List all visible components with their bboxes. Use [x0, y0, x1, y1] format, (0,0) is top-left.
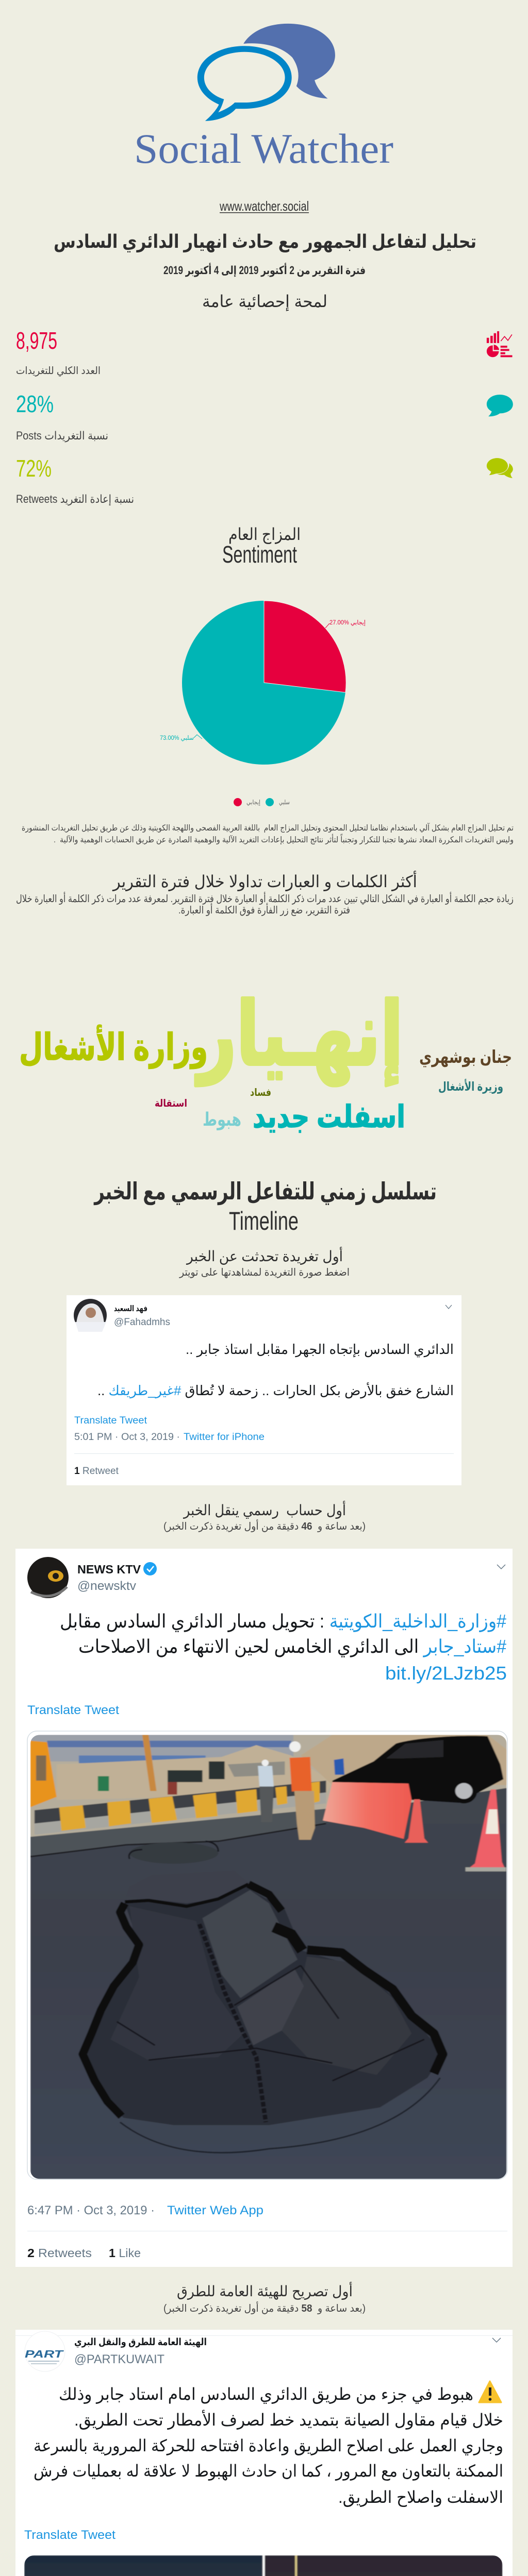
caption: first tweet	[179, 1246, 350, 1278]
panel: NEWS KTV tweet: 6:47 PM · Oct 3, 2019 ·	[27, 2204, 155, 2217]
pie chart: sentiment	[160, 601, 366, 765]
tweet text: PART statement: هبوط في جزء من طريق الدائري السادس امام استاد جابر وذلك	[59, 2385, 473, 2404]
tweet text: PART statement: وجاري العمل على اصلاح الطريق واعادة افتتاحه للحركة المرورية بالسرعة	[34, 2436, 503, 2455]
tweet text: PART statement: الممكنة بالتعاون مع المرور ، كما ان حادث الهبوط لا علاقة له بعمليات فرش	[34, 2462, 503, 2481]
stat: total tweets	[16, 327, 101, 377]
stat: posts share: نسبة التغريدات Posts	[16, 429, 108, 442]
logo: two speech bubbles	[197, 24, 335, 121]
avatar: Fahad	[74, 1299, 107, 1332]
heading: sentiment	[222, 525, 301, 568]
panel: NEWS KTV tweet: #وزارة_الداخلية_الكويتية : تحويل مسار الدائري السادس مقابل	[60, 1611, 506, 1632]
heading: timeline: Timeline	[229, 1207, 299, 1235]
photo: repair crew and excavator	[24, 2555, 503, 2576]
heading: timeline	[94, 1178, 437, 1235]
label: positive share	[325, 619, 366, 628]
caption: first official account: أول حساب رسمي ينقل الخبر	[183, 1500, 346, 1519]
panel: first tweet: الشارع خفق بالأرض بكل الحارات .. زحمة لا تُطاق #غير_طريقك ..	[97, 1382, 454, 1399]
website link: www.watcher.social	[219, 198, 309, 214]
word cloud: استقالة	[155, 1098, 187, 1109]
heading: sentiment: Sentiment	[222, 541, 297, 568]
caption: roads authority statement: (بعد ساعة و 58 دقيقة من أول تغريدة ذكرت الخبر)	[163, 2301, 366, 2314]
stat: retweets share	[16, 455, 134, 506]
icon: verified badge	[143, 1562, 157, 1575]
stat: retweets share: نسبة إعادة التغريد Retweets	[16, 493, 134, 506]
panel: NEWS KTV tweet: @newsktv	[77, 1579, 136, 1593]
panel: first tweet: Twitter for iPhone	[184, 1432, 265, 1443]
word cloud: إنهـيار	[195, 986, 403, 1086]
avatar: NEWS KTV	[27, 1557, 69, 1598]
stat: posts share	[16, 391, 108, 442]
word cloud intro	[16, 892, 514, 916]
caption: first official account	[163, 1500, 366, 1532]
panel: NEWS KTV tweet	[15, 1549, 513, 2267]
caption: first official account: (بعد ساعة و 46 دقيقة من أول تغريدة ذكرت الخبر)	[163, 1519, 366, 1532]
label: negative share: سلبي %73.00	[160, 734, 194, 741]
tweet text: PART statement: خلال قيام مقاول الصيانة بتمديد خط لصرف الأمطار تحت الطريق.	[74, 2410, 503, 2430]
panel: PART Kuwait tweet: الهيئة العامة للطرق والنقل البري	[74, 2337, 207, 2348]
avatar: PART logo: PART	[25, 2349, 64, 2360]
heading: sentiment: المزاج العام	[228, 525, 301, 544]
heading: statistics overview: لمحة إحصائية عامة	[202, 292, 327, 311]
icon: warning triangle	[479, 2381, 501, 2402]
panel: PART Kuwait tweet: @PARTKUWAIT	[74, 2352, 164, 2366]
word cloud intro: فترة التقرير، ضع زر الفأرة فوق الكلمة أو العبارة.	[178, 903, 350, 916]
panel: first tweet: فهد السعيد	[114, 1304, 147, 1313]
stat: retweets share: 72%	[16, 455, 52, 482]
panel: NEWS KTV tweet: bit.ly/2LJzb25	[385, 1663, 507, 1684]
panel: first tweet: 1 Retweet	[74, 1466, 119, 1477]
panel: first tweet: Translate Tweet	[74, 1415, 147, 1426]
stat: total tweets: 8,975	[16, 327, 57, 354]
tweet text: PART statement: الاسفلت واصلاح الطريق.	[338, 2488, 503, 2507]
word cloud: هبوط	[203, 1109, 241, 1130]
panel: first tweet	[67, 1295, 461, 1485]
panel: NEWS KTV tweet: #ستاد_جابر الى الدائري الخامس لحين الانتهاء من الاصلاحات	[78, 1636, 506, 1657]
panel: NEWS KTV tweet: 2 Retweets	[27, 2246, 92, 2260]
icon: double speech bubbles	[487, 458, 513, 478]
pie legend: إيجابي	[246, 799, 260, 806]
tweet text: PART statement	[34, 2385, 503, 2507]
panel: PART Kuwait tweet	[15, 2330, 513, 2576]
panel: first tweet: الدائري السادس بإتجاه الجهرا مقابل استاذ جابر ..	[186, 1342, 454, 1358]
word cloud: اسفلت جديد	[253, 1099, 405, 1134]
brand name: Social Watcher	[134, 125, 393, 172]
panel: NEWS KTV tweet: 1 Like	[109, 2246, 141, 2260]
panel: NEWS KTV tweet: NEWS KTV	[77, 1563, 141, 1576]
word cloud	[19, 986, 512, 1134]
panel: NEWS KTV tweet: Translate Tweet	[27, 1703, 119, 1717]
caption: roads authority statement	[163, 2281, 366, 2314]
caption: roads authority statement: أول تصريح للهيئة العامة للطرق	[177, 2281, 353, 2300]
report period: فترة التقرير من 2 أكتوبر 2019 إلى 4 أكتوبر 2019	[163, 262, 366, 277]
pie legend	[234, 798, 290, 806]
panel: NEWS KTV tweet: Twitter Web App	[167, 2204, 263, 2217]
heading: most used words: أكثر الكلمات و العبارات تداولا خلال فترة التقرير	[112, 871, 417, 891]
panel: first tweet: 5:01 PM · Oct 3, 2019 ·	[74, 1432, 180, 1443]
word cloud: فساد	[250, 1087, 271, 1098]
caption: first tweet: أول تغريدة تحدثت عن الخبر	[186, 1246, 343, 1265]
icon: speech bubble	[487, 395, 513, 416]
word cloud: وزيرة الأشغال	[438, 1079, 503, 1094]
label: positive share: إيجابي %27.00	[329, 619, 366, 626]
pie legend: سلبي	[279, 799, 290, 806]
stat: posts share: 28%	[16, 391, 54, 417]
icon: charts	[487, 331, 513, 357]
avatar: PART logo	[25, 2331, 65, 2371]
panel: PART Kuwait tweet: Translate Tweet	[24, 2528, 116, 2542]
stat: total tweets: العدد الكلي للتغريدات	[16, 365, 101, 377]
sentiment method note	[22, 823, 514, 845]
panel: first tweet: @Fahadmhs	[114, 1317, 170, 1328]
caption: first tweet: اضغط صورة التغريدة لمشاهدتها على تويتر	[179, 1267, 350, 1278]
photo: road sinkhole	[30, 1735, 507, 2179]
word cloud: وزارة الأشغال	[19, 1024, 208, 1069]
